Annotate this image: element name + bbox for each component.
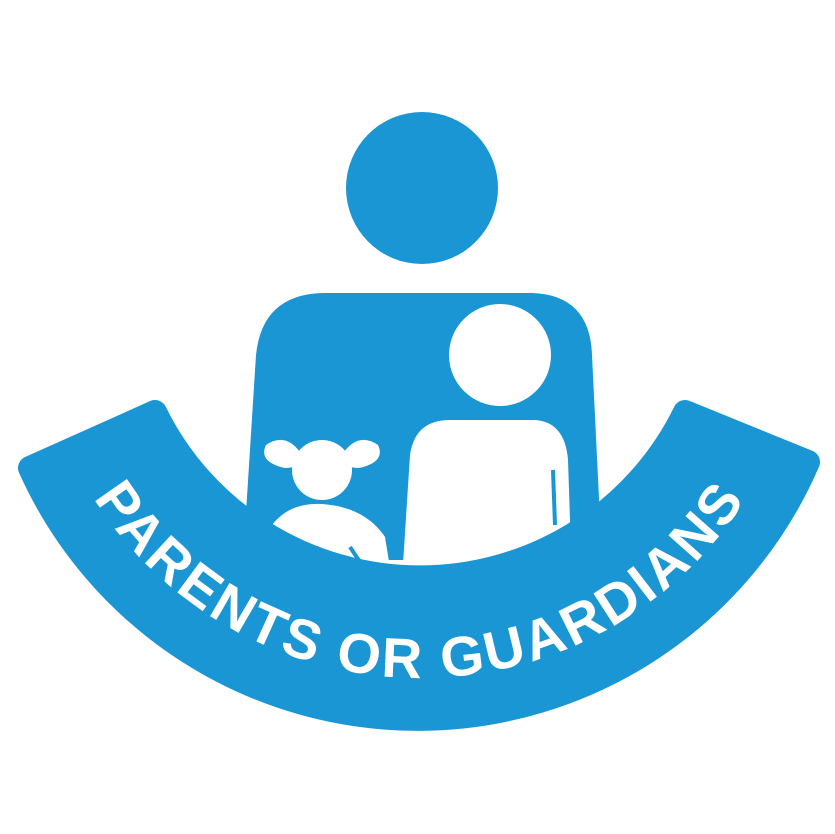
icon: adult head: [346, 112, 498, 264]
banner text: PARENTS OR GUARDIANS: [95, 479, 740, 678]
banner: [30, 412, 808, 719]
icon: child body: [402, 420, 572, 580]
icon: girl: [264, 440, 392, 580]
icon: child head: [449, 304, 551, 406]
icon: adult body: [243, 293, 602, 560]
